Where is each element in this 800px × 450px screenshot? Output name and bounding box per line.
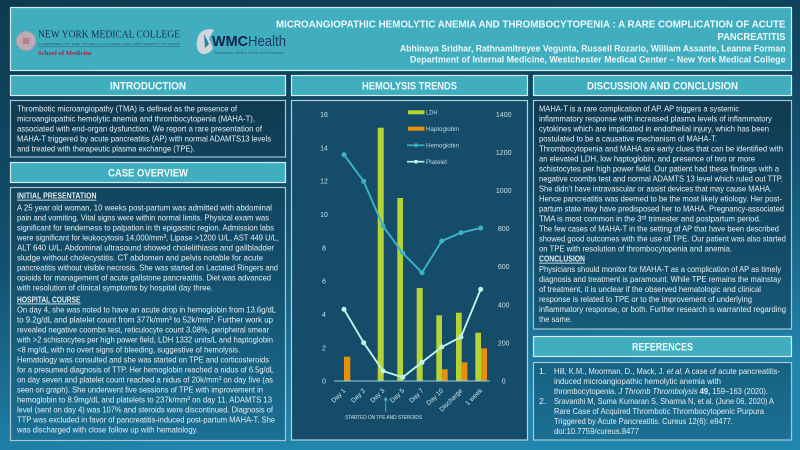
- left axis labels: 2: [322, 345, 326, 352]
- legend: [407, 110, 459, 166]
- affiliation: Department of Internal Medicine, Westchester Medical Center – New York Medical College: [410, 55, 786, 65]
- x axis labels: 1 week: [464, 387, 485, 407]
- panel: discussion and conclusion text: She didn’t have intravascular or assist devices that may cause MAHA.: [539, 184, 772, 194]
- legend: Hemoglobin: [426, 142, 459, 150]
- left axis labels: [320, 112, 328, 386]
- panel: discussion and conclusion text: inflammatory response with increased plasma levels of inflammatory: [539, 114, 773, 124]
- heading: introduction: INTRODUCTION: [110, 80, 186, 92]
- panel: discussion and conclusion text: on TPE with resolution of thrombocytopenia and anemia.: [539, 244, 732, 254]
- x axis labels: Day 7: [408, 387, 426, 405]
- heading: discussion and conclusion: [534, 76, 792, 96]
- left axis labels: 16: [320, 112, 328, 119]
- logo: WMC Health: Westchester Medical Center Health Network: [214, 51, 284, 55]
- x axis labels: Discharge: [438, 387, 465, 413]
- right axis labels: 0: [502, 379, 506, 386]
- right axis labels: 1200: [496, 150, 512, 157]
- legend: LDH: [426, 110, 438, 116]
- left axis labels: 4: [322, 312, 326, 319]
- logo: New York Medical College: [16, 28, 181, 57]
- panel: case overview text: with >2 schistocytes per high power field, LDH 1332 units/L and haptoglobin: [16, 334, 273, 344]
- panel: references list: 2.: [539, 396, 546, 406]
- left axis labels: 0: [322, 379, 326, 386]
- heading: references: REFERENCES: [632, 342, 693, 354]
- panel: case overview text: ALT 640 U/L. Abdominal ultrasound showed cholelithiasis and gallbladder: [17, 243, 274, 253]
- panel: introduction text: Thrombotic microangiopathy (TMA) is defined as the presence of: [17, 104, 238, 114]
- legend: Platelet: [426, 159, 447, 166]
- panel: introduction text: MAHA-T triggered by acute pancreatitis (AP) with normal ADAMTS13 levels: [17, 134, 271, 144]
- panel: discussion and conclusion text: of treatment, it is unclear if the observed hematologic and clinical: [539, 284, 761, 294]
- heading: case overview: CASE OVERVIEW: [108, 168, 188, 180]
- right axis labels: 1000: [496, 188, 512, 195]
- panel: header banner: [10, 8, 792, 70]
- logo: New York Medical College: A MEMBER OF THE TOURO COLLEGE AND UNIVERSITY SYSTEM: [38, 42, 181, 46]
- panel: references list: Hill, K.M., Moorman, D., Mack, J. et al. A case of acute pancreatitis-: [554, 366, 780, 376]
- right axis labels: 200: [498, 340, 510, 348]
- panel: discussion and conclusion text: response is related to TPE or to the improvement of underlying: [539, 294, 752, 304]
- panel: hemolysis trends chart: [292, 100, 528, 440]
- panel: case overview text: revealed negative coombs test, reticulocyte count 3.08%, peripheral smear: [17, 324, 269, 334]
- logo: New York Medical College: School of Medicine: [38, 50, 92, 57]
- arrow: treatment start: [383, 396, 388, 412]
- panel: case overview text: A 25 year old woman, 10 weeks post-partum was admitted with abdominal: [17, 203, 272, 213]
- panel: case overview text: was discharged with close follow up with hematology.: [16, 424, 198, 434]
- panel: discussion and conclusion text: postulated to be a causative mechanism of MAHA-T.: [539, 134, 717, 144]
- panel: case overview text: for a presumed diagnosis of TTP. Her hemoglobin reached a nidus of 6.5g/dL: [17, 364, 274, 374]
- panel: case overview text: INITIAL PRESENTATION: [17, 191, 96, 201]
- x axis labels: Day 10: [425, 387, 445, 407]
- panel: case overview text: seen on graph). She underwent five sessions of TPE with improvement in: [17, 384, 263, 394]
- panel: references list: Rare Case of Acquired Thrombotic Thrombocytopenic Purpura: [554, 406, 764, 416]
- panel: discussion and conclusion text: cytokines which are implicated in endothelial injury, which has been: [539, 124, 769, 134]
- left axis labels: 6: [322, 279, 326, 286]
- authors: Abhinaya Sridhar, Rathnamitreyee Vegunta, Russell Rozario, William Assante, Leanne Forman: [400, 44, 786, 54]
- right axis labels: 1400: [496, 112, 512, 119]
- logo: WMC Health: Health: [248, 33, 286, 50]
- left axis labels: 14: [320, 145, 328, 152]
- heading: hemolysis trends: HEMOLYSIS TRENDS: [362, 80, 457, 92]
- panel: case overview text: HOSPITAL COURSE: [17, 294, 81, 304]
- logo: WMC Health: WMC: [212, 33, 248, 50]
- left axis labels: 10: [320, 212, 328, 219]
- panel: case overview text: Hematology was consulted and she was started on TPE and corticosteroids: [17, 354, 269, 364]
- panel: discussion and conclusion text: the same.: [539, 314, 572, 324]
- x axis labels: Day 1: [330, 387, 348, 405]
- panel: introduction text: and treated with therapeutic plasma exchange (TPE).: [17, 144, 195, 154]
- panel: discussion and conclusion text: [534, 100, 792, 329]
- panel: discussion and conclusion text: MAHA-T is a rare complication of AP. AP triggers a systemic: [539, 104, 740, 114]
- right axis labels: [496, 112, 512, 386]
- left axis labels: 12: [320, 179, 328, 186]
- right axis labels: 600: [498, 264, 510, 271]
- panel: case overview text: TTP was excluded in favor of pancreatitis-induced post-partum MAHA-T. She: [17, 414, 275, 424]
- panel: references list: [534, 362, 792, 440]
- panel: introduction text: [10, 100, 286, 157]
- legend: Haptoglobin: [426, 126, 459, 133]
- heading: introduction: [10, 76, 286, 96]
- panel: discussion and conclusion text: CONCLUSION: [539, 254, 585, 264]
- logo: WMC Health: [197, 29, 286, 55]
- x axis labels: [330, 387, 485, 413]
- panel: case overview text: were significant for leukocytosis 14,000/mm³, Lipase >1200 U/L, AST 449 U/L,: [16, 233, 279, 243]
- panel: case overview text: sludge without cholecystitis. CT abdomen and pelvis notable for acute: [17, 253, 263, 263]
- panel: case overview text: pain and vomiting. Vital signs were within normal limits. Physical exam was: [17, 213, 269, 223]
- annotation: started on TPE and steroids: STARTED ON TPE AND STEROIDS: [345, 415, 422, 421]
- panel: discussion and conclusion text: schistocytes per high power field. Our patient had these findings with a: [539, 164, 779, 174]
- left axis labels: 8: [322, 245, 326, 252]
- x axis labels: Day 5: [389, 387, 406, 405]
- panel: case overview text: significant for tenderness to palpation in th epigastric region. Admission labs: [17, 223, 274, 233]
- x axis labels: Day 2: [350, 387, 367, 405]
- panel: case overview text: pancreatitis without visible necrosis. She was started on Lactated Ringers and: [17, 263, 278, 273]
- panel: discussion and conclusion text: an elevated LDH, low haptoglobin, and presence of two or more: [539, 154, 755, 164]
- bars: LDH: [378, 128, 481, 381]
- right axis labels: 400: [498, 302, 510, 310]
- bars: haptoglobin: [344, 348, 487, 381]
- panel: case overview text: to 9.2g/dL and platelet count from 377k/mm³ to 52k/mm³. Further work up: [17, 314, 273, 324]
- panel: case overview text: on day seven and platelet count reached a nidus of 20k/mm³ on day five (as: [17, 374, 273, 384]
- heading: discussion and conclusion: DISCUSSION AND CONCLUSION: [587, 80, 738, 92]
- panel: references list: thrombocytopenia. J Thromb Thrombolysis 49, 159–163 (2020).: [554, 386, 768, 396]
- heading: hemolysis trends: [292, 76, 528, 96]
- panel: references list: Triggered by Acute Pancreatitis. Cureus 12(6): e8477.: [554, 416, 733, 426]
- panel: introduction text: microangiopathic hemolytic anemia and thrombocytopenia (MAHA-T),: [17, 114, 255, 124]
- panel: discussion and conclusion text: TMA is most common in the 3ʳᵈ trimester and postpartum period.: [539, 214, 761, 224]
- line: hemoglobin: [342, 152, 483, 275]
- panel: references list: doi:10.7759/cureus.8477: [554, 426, 639, 436]
- right axis labels: 800: [498, 226, 510, 233]
- panel: case overview text: level (sent on day 4) was 107% and steroids were discontinued. Diagnosis of: [17, 404, 274, 414]
- title: MICROANGIOPATHIC HEMOLYTIC ANEMIA AND THROMBOCYTOPENIA : A RARE COMPLICATION OF ACUTE: [276, 20, 786, 30]
- panel: case overview text: opioids for management of acute gallstone pancreatitis. Diet was advanced: [17, 273, 271, 283]
- panel: introduction text: associated with end-organ dysfunction. We report a rare presentation of: [17, 124, 263, 134]
- title second line: PANCREATITIS: [718, 32, 786, 43]
- panel: case overview text: with resolution of clinical symptoms by hospital day three.: [16, 283, 213, 293]
- panel: case overview text: [10, 188, 286, 440]
- line: platelet: [342, 287, 483, 380]
- panel: references list: induced microangiopathic hemolytic anemia with: [554, 376, 721, 386]
- heading: case overview: [10, 162, 286, 182]
- panel: case overview text: <8 mg/dL with no overt signs of bleeding, suggestive of hemolysis.: [17, 344, 240, 354]
- panel: references list: 1.: [539, 366, 546, 376]
- x axis labels: Day 3: [369, 387, 387, 405]
- panel: case overview text: On day 4, she was noted to have an acute drop in hemoglobin from 13.6g/dL: [17, 304, 276, 314]
- panel: case overview text: hemoglobin to 8.9mg/dL and platelets to 237k/mm³ on day 11. ADAMTS 13: [17, 394, 272, 404]
- logo: New York Medical College: NEW YORK MEDICAL COLLEGE: [38, 28, 180, 40]
- heading: references: [534, 336, 792, 356]
